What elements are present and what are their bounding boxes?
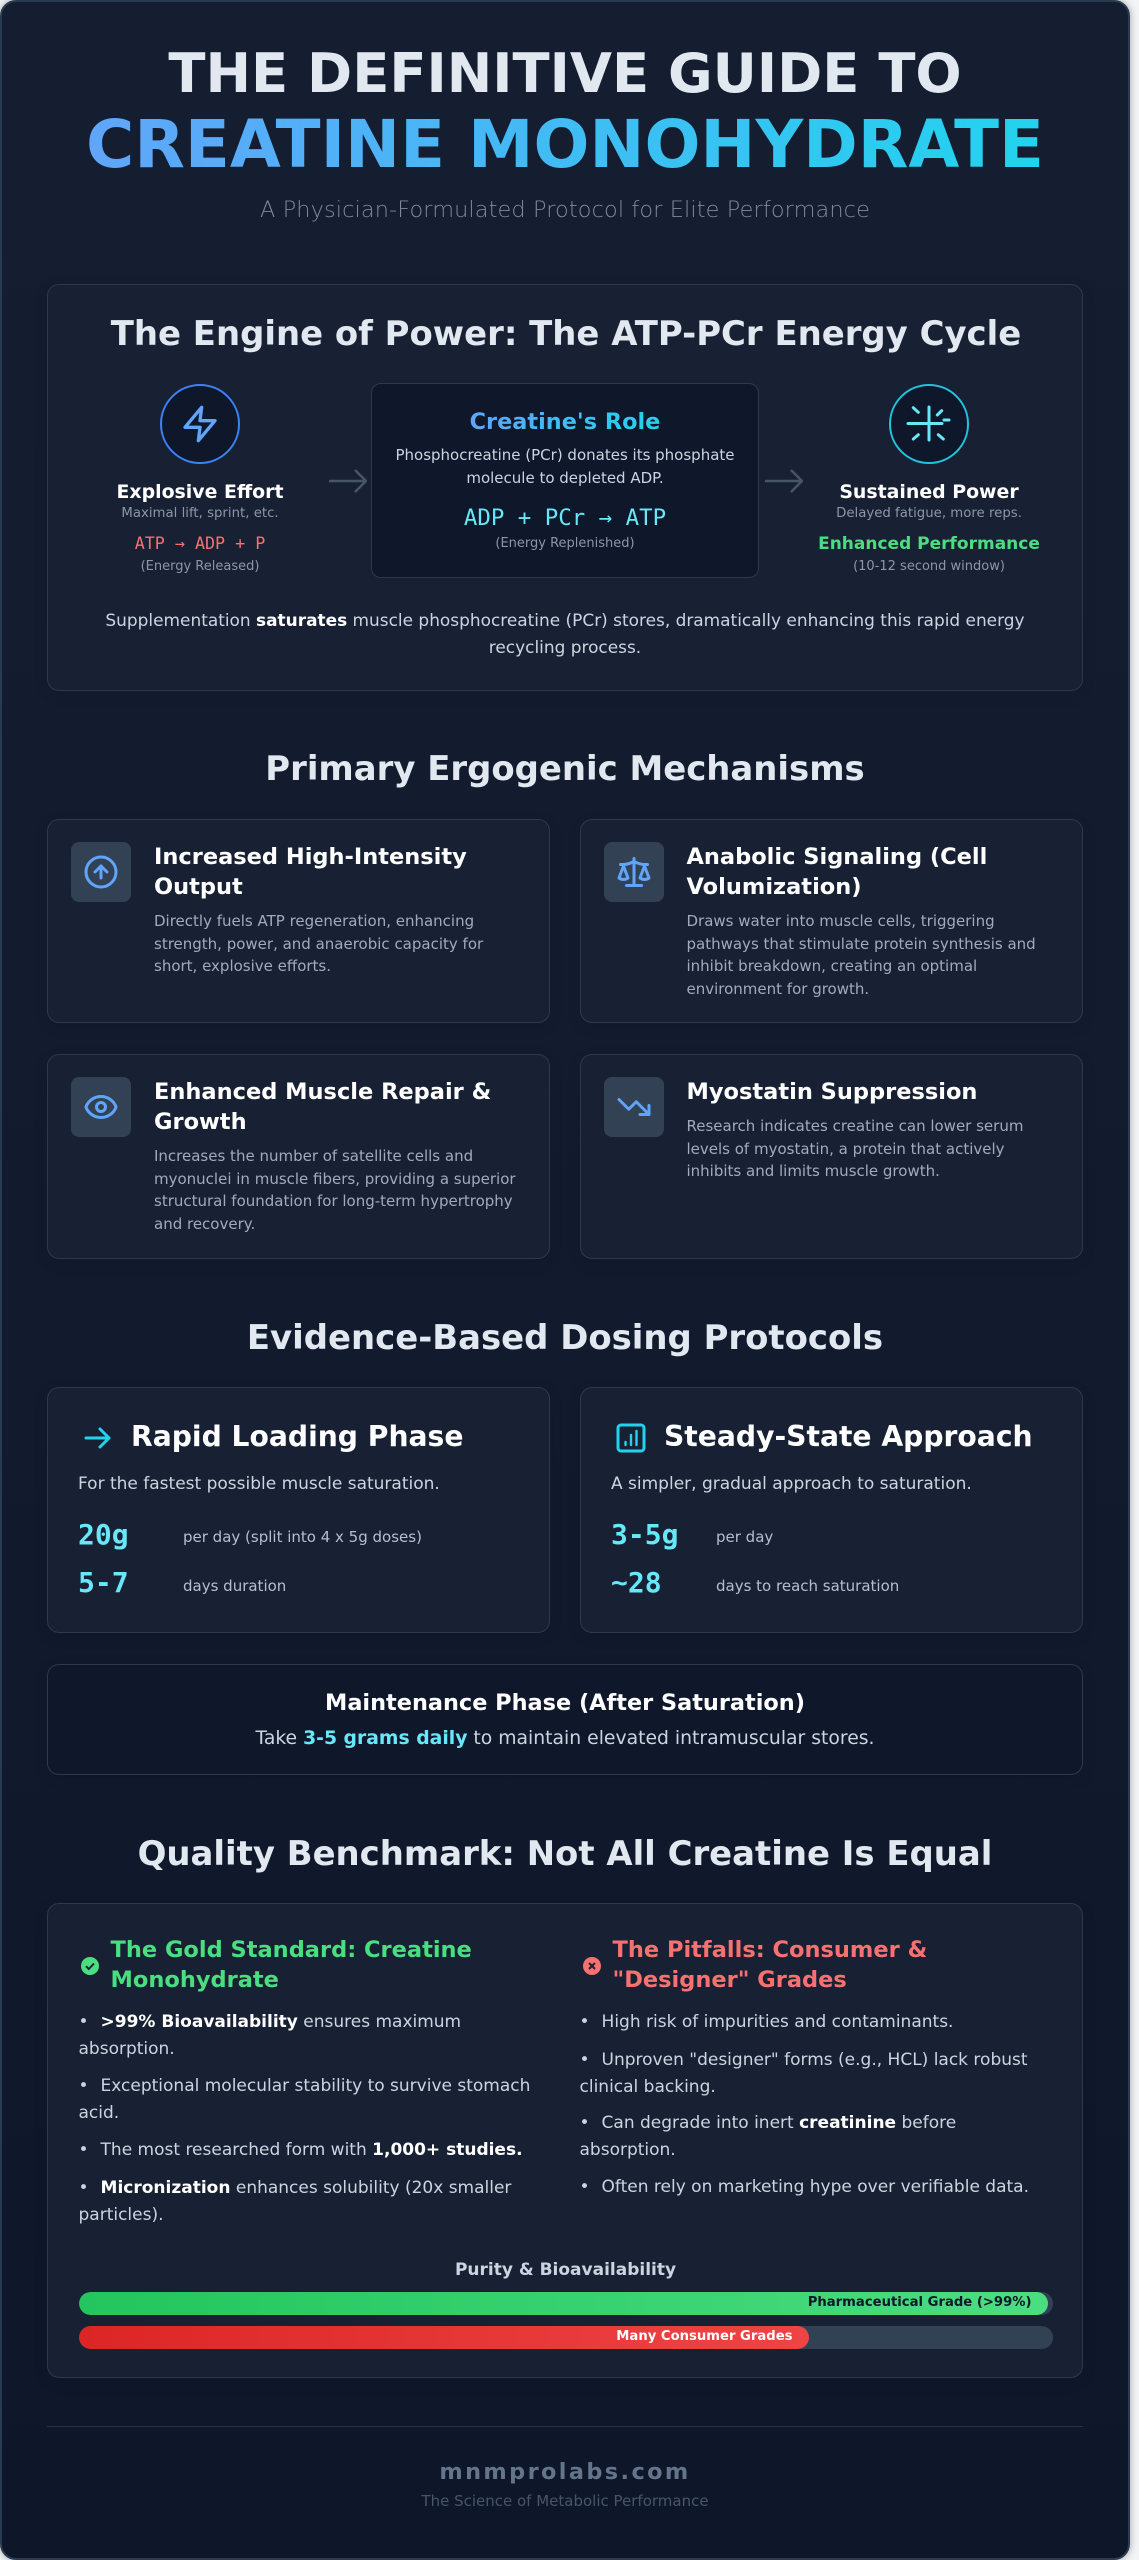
card heading: Output [154,874,243,900]
step: sustained power [818,384,1040,574]
icon: lightning bolt [160,384,240,464]
step caption: Delayed fatigue, more reps. [836,506,1022,521]
card text: Research indicates creatine can lower serum [686,1117,1023,1135]
card text: levels of myostatin, a protein that actively [686,1140,1005,1158]
duration label: days duration [183,1577,286,1595]
heading: mechanisms: Primary Ergogenic Mechanisms [265,749,865,788]
maintenance text: Take 3-5 grams daily to maintain elevated intramuscular stores. [255,1728,875,1749]
card text [686,912,1036,998]
card: steady state [580,1387,1083,1633]
card text: inhibit breakdown, creating an optimal [686,957,977,975]
bullet list: • Micronization enhances solubility (20x smaller [78,2178,511,2198]
step: explosive effort [116,384,284,574]
card intro: A simpler, gradual approach to saturation. [611,1474,972,1494]
bullet list: acid. [78,2102,119,2122]
column heading [110,1937,472,1993]
card: anabolic signaling [580,819,1083,1023]
title block [86,42,1044,223]
duration label: days to reach saturation [716,1577,899,1595]
bullet list: • Can degrade into inert creatinine before [580,2113,956,2133]
footer brand: mnmprolabs.com [439,2459,691,2485]
bullet list: clinical backing. [580,2076,716,2096]
panel: maintenance phase [47,1664,1083,1775]
card: high-intensity output [47,819,550,1023]
card heading: Myostatin Suppression [686,1079,977,1105]
card text: strength, power, and anaerobic capacity for [154,935,483,953]
icon: arrow right [84,1427,111,1449]
icon: scale [604,842,664,902]
card text: Directly fuels ATP regeneration, enhancing [154,912,474,930]
bar: consumer grades: Many Consumer Grades [616,2329,792,2344]
panel: ATP-PCr energy cycle [47,284,1083,691]
bullet list [580,2012,1029,2197]
duration value: ~28 [611,1566,662,1599]
footer tagline: The Science of Metabolic Performance [421,2492,709,2510]
column heading: The Gold Standard: Creatine [110,1937,472,1963]
card text: structural foundation for long-term hypertrophy [154,1192,513,1210]
column heading: The Pitfalls: Consumer & [612,1937,927,1963]
dose value: 3-5g [611,1518,678,1551]
equation note: (Energy Replenished) [495,536,635,551]
column: gold standard [78,1937,530,2224]
bullet list: • High risk of impurities and contaminants. [580,2012,953,2032]
dose value: 20g [78,1518,129,1551]
card heading: Volumization) [686,874,862,900]
step title: Sustained Power [839,481,1019,503]
role text: Phosphocreatine (PCr) donates its phosphate [395,446,735,464]
icon: eye [71,1077,131,1137]
role text [395,446,735,487]
column heading [612,1937,927,1993]
column heading: Monohydrate [110,1967,279,1993]
maintenance heading: Maintenance Phase (After Saturation) [325,1690,805,1716]
bullet list: • >99% Bioavailability ensures maximum [78,2012,461,2032]
heading: quality: Quality Benchmark: Not All Creatine Is Equal [138,1834,992,1873]
step title: Explosive Effort [116,481,284,503]
card heading: Steady-State Approach [664,1420,1033,1453]
summary text: Supplementation saturates muscle phosphocreatine (PCr) stores, dramatically enhancing this rapid energy [105,610,1025,630]
card heading: Growth [154,1109,247,1135]
card text: Increases the number of satellite cells and [154,1147,473,1165]
card text: environment for growth. [686,980,869,998]
bullet list: • Exceptional molecular stability to survive stomach [78,2076,530,2096]
bar: pharmaceutical grade: Pharmaceutical Grade (>99%) [808,2295,1032,2310]
bullet list [78,2012,530,2224]
bullet list: • Often rely on marketing hype over verifiable data. [580,2177,1029,2197]
bullet list: • The most researched form with 1,000+ studies. [78,2140,523,2160]
card: muscle repair [47,1054,550,1259]
title line 2 gradient: CREATINE MONOHYDRATE [86,106,1044,183]
card heading: Increased High-Intensity [154,844,467,870]
role heading: Creatine's Role [470,409,660,435]
card text: short, explosive efforts. [154,957,331,975]
card text: myonuclei in muscle fibers, providing a superior [154,1170,516,1188]
card text [686,1117,1023,1180]
bullet list: particles). [78,2204,164,2224]
card heading [154,1079,491,1135]
column: pitfalls [580,1937,1029,2197]
card text: inhibits and limits muscle growth. [686,1162,940,1180]
performance result: Enhanced Performance [818,534,1040,554]
card heading [686,844,987,900]
card text: Draws water into muscle cells, triggering [686,912,995,930]
card text: pathways that stimulate protein synthesis and [686,935,1036,953]
dose label: per day (split into 4 x 5g doses) [183,1528,422,1546]
equation: ATP → ADP + P [135,533,265,553]
card: rapid loading [47,1387,550,1633]
card text [154,1147,516,1233]
chart: purity and bioavailability [79,2260,1053,2349]
icon: sparkle cross [889,384,969,464]
icon: check [81,1957,99,1975]
chart title: Purity & Bioavailability [455,2260,676,2280]
panel: quality comparison [47,1903,1083,2378]
result note: (10-12 second window) [853,559,1005,574]
duration value: 5-7 [78,1566,129,1599]
bar: pharmaceutical grade [78,2292,1052,2315]
bullet list: absorption. [78,2038,175,2058]
icon: cross [583,1957,601,1975]
icon: chart square [616,1424,646,1452]
step caption: Maximal lift, sprint, etc. [121,506,279,521]
heading: dosing: Evidence-Based Dosing Protocols [247,1318,883,1357]
card heading [154,844,467,900]
equation: ADP + PCr → ATP [464,505,666,531]
icon: circle arrow up [71,842,131,902]
card text [154,912,484,975]
title line 1: THE DEFINITIVE GUIDE TO [168,42,962,105]
card heading: Anabolic Signaling (Cell [686,844,987,870]
panel: creatine's role [371,383,759,578]
panel heading: The Engine of Power: The ATP-PCr Energy Cycle [111,314,1021,353]
card: myostatin suppression [580,1054,1083,1259]
bar: consumer grades [78,2326,1052,2349]
subtitle: A Physician-Formulated Protocol for Elite Performance [260,197,870,223]
bullet list: • Unproven "designer" forms (e.g., HCL) lack robust [580,2050,1028,2070]
footer [421,2459,709,2510]
summary text [105,610,1025,657]
arrow: effort to role [329,469,367,493]
bullet list: absorption. [580,2140,676,2160]
summary text: recycling process. [489,637,641,657]
icon: trending down [604,1077,664,1137]
role text: molecule to depleted ADP. [466,469,664,487]
arrow: role to power [765,469,803,493]
dose label: per day [716,1528,773,1546]
card intro: For the fastest possible muscle saturation. [78,1474,440,1494]
card heading: Rapid Loading Phase [131,1420,463,1453]
card text: and recovery. [154,1215,255,1233]
card heading: Enhanced Muscle Repair & [154,1079,491,1105]
equation note: (Energy Released) [141,559,259,574]
column heading: "Designer" Grades [612,1967,847,1993]
